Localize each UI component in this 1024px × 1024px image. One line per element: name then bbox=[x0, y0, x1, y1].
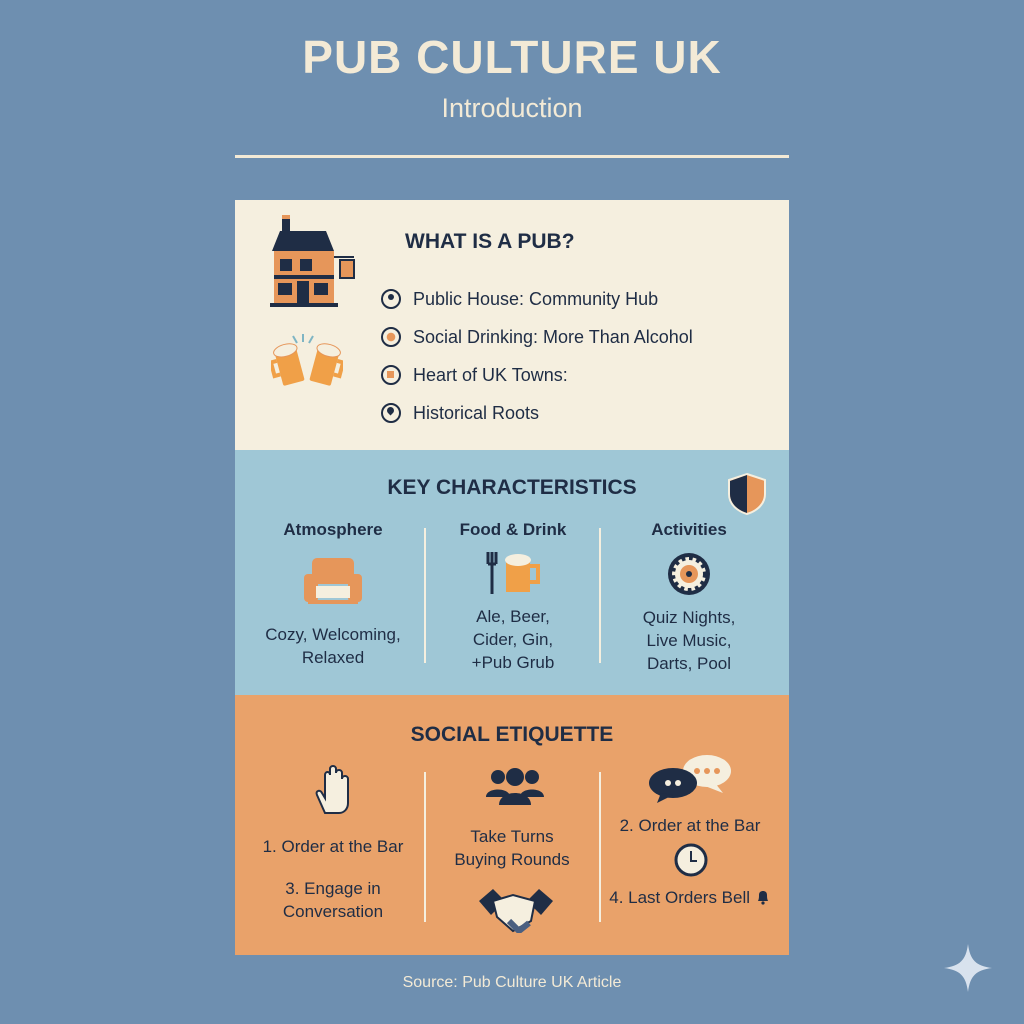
source: Source: Pub Culture UK Article bbox=[403, 974, 621, 991]
item 1: Public House: Community Hub bbox=[413, 288, 658, 308]
column: atmosphere: Cozy, Welcoming, bbox=[265, 625, 401, 644]
column: food & drink bbox=[460, 520, 566, 672]
text: rule 2: 2. Order at the Bar bbox=[620, 816, 760, 835]
icon: group bbox=[486, 768, 544, 805]
panel: social etiquette bbox=[235, 695, 789, 955]
text: rule 3 bbox=[283, 879, 383, 921]
item 2: Social Drinking: More Than Alcohol bbox=[413, 326, 693, 346]
panel: what is a pub bbox=[235, 200, 789, 450]
text: rule 3: 3. Engage in bbox=[285, 879, 381, 898]
column: food & drink: Cider, Gin, bbox=[473, 630, 553, 649]
column: atmosphere: Relaxed bbox=[302, 648, 364, 667]
column: activities: Activities bbox=[651, 520, 727, 539]
panel: key characteristics bbox=[235, 450, 789, 695]
item 4: Historical Roots bbox=[413, 402, 539, 422]
title: PUB CULTURE UK bbox=[302, 31, 722, 83]
icon: clock bbox=[674, 844, 708, 876]
column: food & drink: Ale, Beer, bbox=[476, 607, 550, 626]
icon: hand bbox=[316, 765, 349, 814]
text: take turns: Take Turns bbox=[470, 827, 554, 846]
item 3: Heart of UK Towns: bbox=[413, 364, 568, 384]
text: rule 3: Conversation bbox=[283, 902, 383, 921]
icon: armchair bbox=[304, 558, 362, 604]
column: atmosphere: Atmosphere bbox=[283, 520, 383, 539]
list bbox=[381, 288, 693, 423]
column: food & drink: Food & Drink bbox=[460, 520, 566, 539]
text: take turns bbox=[454, 827, 570, 869]
icon: sparkle bbox=[944, 944, 992, 992]
text: rule 1: 1. Order at the Bar bbox=[263, 837, 403, 856]
heading: SOCIAL ETIQUETTE bbox=[411, 723, 613, 746]
subtitle: Introduction bbox=[441, 93, 583, 123]
text: take turns: Buying Rounds bbox=[454, 850, 570, 869]
icon: shield bbox=[728, 473, 766, 515]
column: atmosphere bbox=[265, 520, 401, 667]
icon: speech bubbles bbox=[649, 755, 731, 803]
column: activities: Darts, Pool bbox=[647, 654, 731, 673]
text: rule 4 with bell: 4. Last Orders Bell bbox=[609, 888, 750, 907]
column: activities bbox=[643, 520, 735, 673]
icon: fork and beer bbox=[486, 552, 540, 594]
column: food & drink: +Pub Grub bbox=[472, 653, 554, 672]
icon: handshake bbox=[479, 889, 553, 933]
icon: pub building bbox=[270, 215, 355, 307]
icon: beer mugs bbox=[271, 334, 343, 386]
column: activities: Live Music, bbox=[646, 631, 732, 650]
heading: WHAT IS A PUB? bbox=[405, 230, 575, 253]
column: activities: Quiz Nights, bbox=[643, 608, 735, 627]
icon: dartboard bbox=[668, 553, 710, 595]
heading: KEY CHARACTERISTICS bbox=[387, 476, 637, 499]
